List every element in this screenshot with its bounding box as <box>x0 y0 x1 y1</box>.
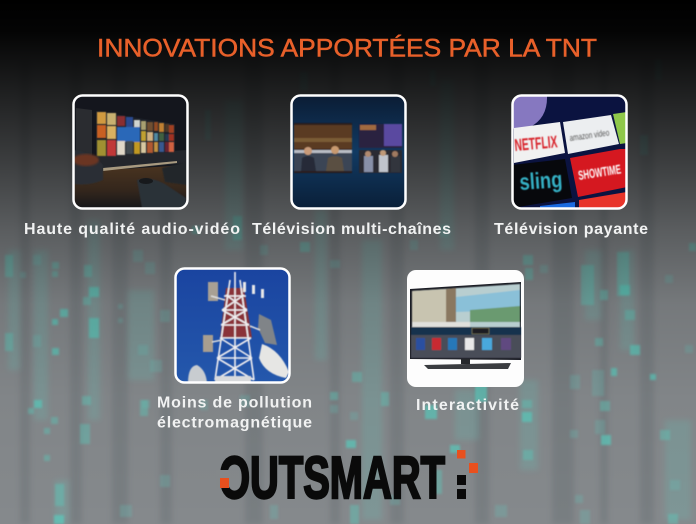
image: home cinema room <box>73 95 188 209</box>
image: multi-channel screens <box>291 95 406 209</box>
tile text <box>514 128 622 195</box>
image: telecom tower <box>175 268 290 384</box>
label: Télévision payante <box>494 221 648 238</box>
panel: interactivité <box>407 270 524 414</box>
label: Haute qualité audio-vidéo <box>24 221 240 238</box>
panel: moins de pollution électromagnétique <box>157 268 312 432</box>
image: streaming tiles <box>512 95 627 209</box>
label: électromagnétique <box>157 414 312 432</box>
panel: télévision multi-chaînes <box>252 95 451 238</box>
label: Moins de pollution <box>157 394 312 412</box>
tile text: SHOWTIME <box>577 161 622 183</box>
label: Interactivité <box>416 397 519 414</box>
tile text: sling <box>519 166 563 195</box>
label: Télévision multi-chaînes <box>252 221 451 238</box>
image: smart TV <box>410 282 521 369</box>
panel: télévision payante <box>494 95 648 238</box>
tile text: NETFLIX <box>514 132 559 155</box>
label <box>157 394 312 432</box>
tile text: amazon video <box>569 128 610 143</box>
title: INNOVATIONS APPORTÉES PAR LA TNT <box>97 34 597 62</box>
logo: Outsmart: OUTSMART <box>219 445 445 511</box>
panel: haute qualité audio-vidéo <box>24 95 240 238</box>
